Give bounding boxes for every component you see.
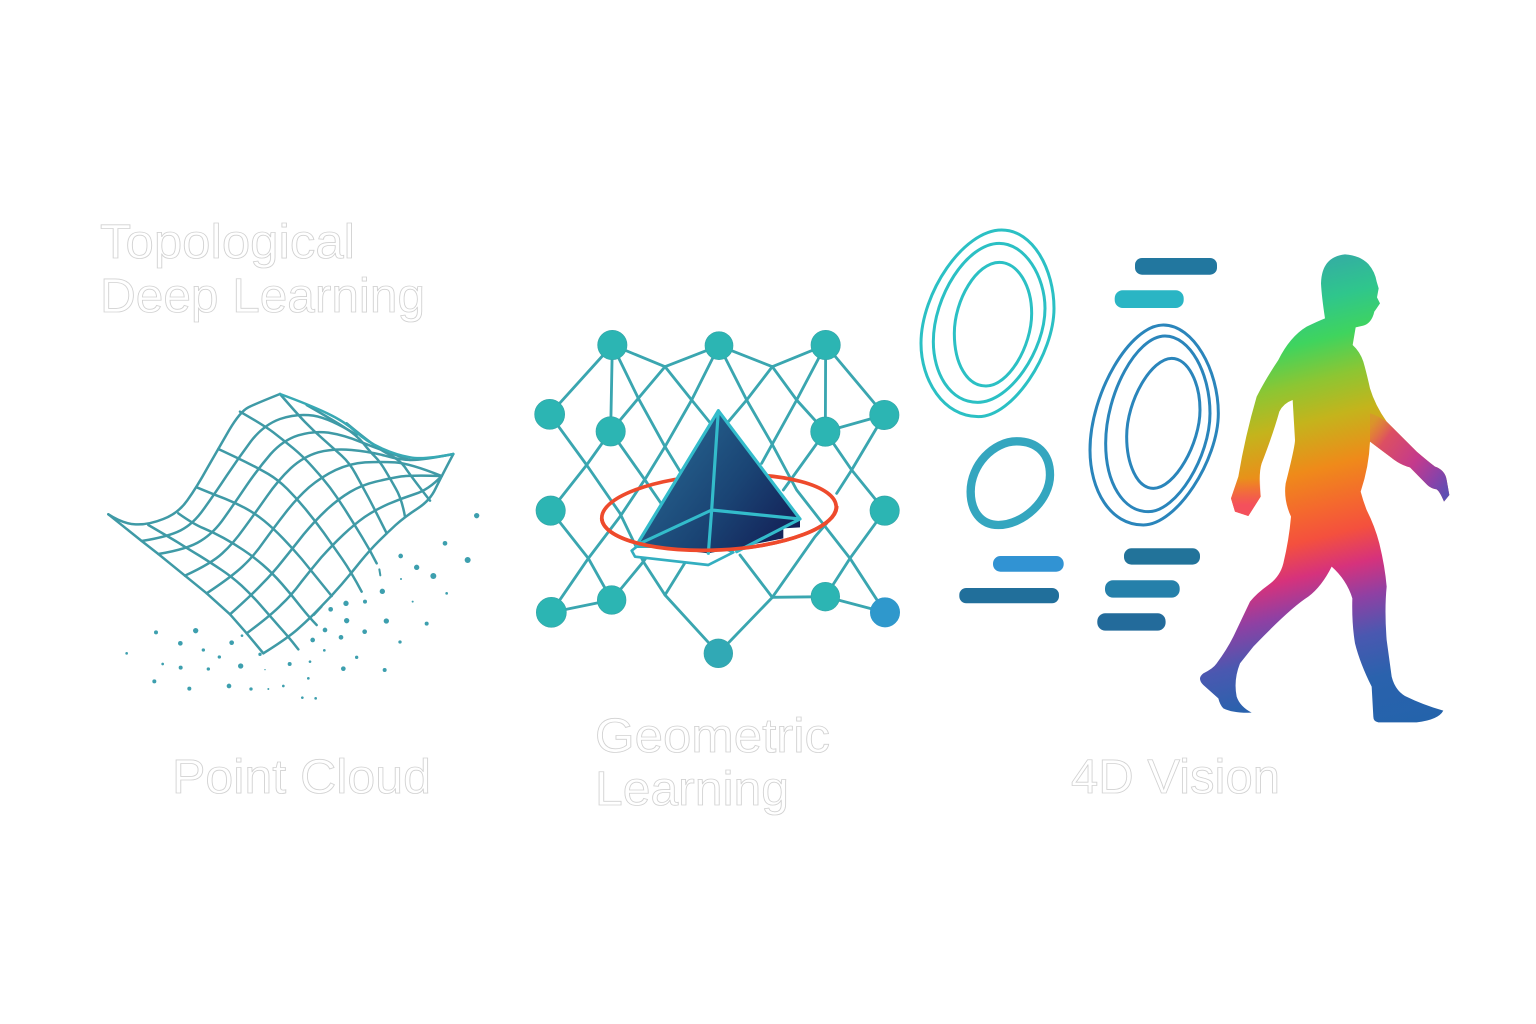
blue contour group (1090, 325, 1218, 525)
heading: Geometric Learning: Learning (595, 763, 789, 816)
heading: Topological Deep Learning: Topological (100, 216, 355, 269)
label: Point Cloud: Point Cloud (172, 751, 431, 804)
scattered points (125, 513, 479, 700)
contour ovals (921, 230, 1218, 525)
heading: Topological Deep Learning (100, 216, 425, 323)
teal contour group (921, 230, 1054, 417)
body silhouette (1200, 254, 1449, 722)
label: 4D Vision: 4D Vision (1071, 751, 1280, 804)
rear hand shading (1231, 477, 1261, 516)
heading: Topological Deep Learning: Deep Learning (100, 270, 425, 323)
panel: 4D vision ovals and bars (921, 230, 1218, 631)
red orbit ring (front) (602, 506, 837, 550)
rounded bars (959, 258, 1217, 631)
red orbit ring (back) (600, 469, 838, 556)
network nodes (535, 330, 900, 668)
icon: walking human figure (1200, 254, 1449, 722)
forward arm shading (1370, 413, 1449, 502)
wireframe mesh (108, 394, 453, 653)
panel: geometric learning network (535, 330, 900, 668)
pyramid (637, 411, 800, 553)
pyramid base shadow (632, 547, 733, 565)
thick ring (971, 441, 1050, 525)
network edges (550, 345, 885, 653)
panel: point cloud surface (108, 394, 479, 700)
heading: Geometric Learning (595, 710, 830, 816)
heading: Geometric Learning: Geometric (595, 710, 830, 763)
